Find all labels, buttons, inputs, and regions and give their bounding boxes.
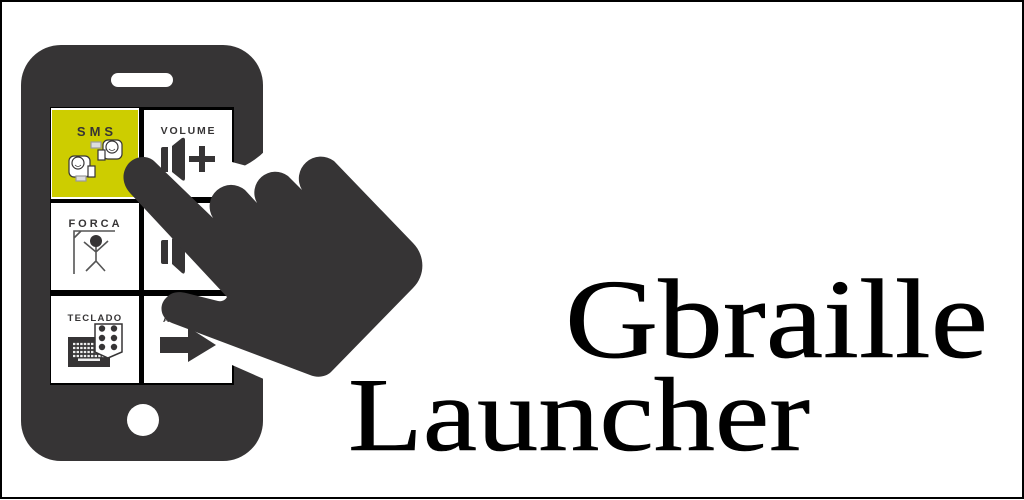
phone body [21, 45, 263, 461]
app grid [50, 107, 234, 385]
home button [127, 404, 159, 436]
hand halo [232, 150, 266, 380]
tile: volume down [144, 203, 232, 290]
icon: people messaging [69, 140, 122, 181]
phone speaker [111, 73, 173, 87]
icon: hangman [74, 231, 115, 274]
tile: SMS [51, 108, 139, 199]
tile: teclado: TECLADO [67, 313, 123, 324]
hand pointer [123, 157, 422, 377]
title: Launcher: Launcher [348, 356, 810, 473]
tile: forca [51, 203, 139, 290]
tile: arrow: A [163, 314, 169, 324]
tile: arrow [144, 296, 232, 383]
tile: SMS: SMS [77, 124, 117, 139]
title: Gbraille: Gbraille [565, 257, 988, 382]
tile: teclado [51, 296, 139, 383]
tile: volume up: VOLUME [161, 125, 216, 137]
icon: braille plate [95, 324, 122, 358]
icon: keyboard [68, 337, 110, 367]
tile: forca: FORCA [68, 218, 123, 230]
tile: volume up [144, 110, 232, 197]
